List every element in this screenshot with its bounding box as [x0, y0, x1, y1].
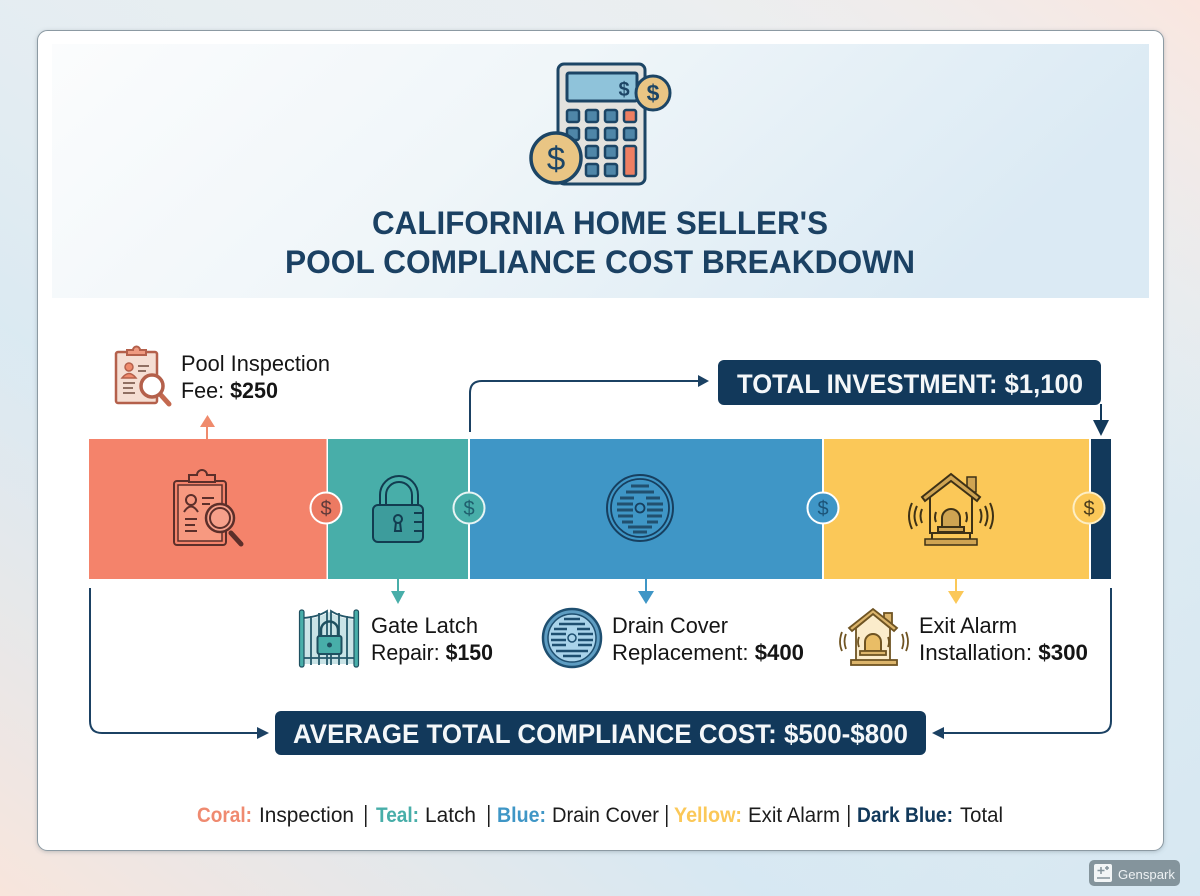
- watermark: Genspark: Genspark: [1118, 868, 1176, 882]
- callout: average total compliance cost: [275, 711, 926, 755]
- label: pool inspection fee: [181, 351, 330, 403]
- title: CALIFORNIA HOME SELLER'S: [372, 205, 828, 241]
- segment: blue drain cover: [470, 439, 822, 579]
- segment: dark blue total: [1091, 439, 1111, 579]
- segment: coral inspection: [89, 439, 326, 579]
- icon: drain cover small: [543, 609, 601, 667]
- arrow: left bracket to average cost: [90, 588, 269, 739]
- label: drain cover replacement: Drain Cover: [612, 613, 728, 638]
- legend: Coral:: [197, 804, 252, 827]
- badge: teal dollar: $: [463, 498, 475, 520]
- legend: Latch: [425, 804, 476, 827]
- title: [285, 205, 915, 280]
- label: drain cover replacement: [612, 613, 804, 665]
- panel: header band: [52, 44, 1149, 298]
- label: gate latch repair: Repair: $150: [371, 640, 493, 665]
- segment: yellow exit alarm: [824, 439, 1089, 579]
- label: gate latch repair: Gate Latch: [371, 613, 478, 638]
- legend: Drain Cover: [552, 804, 659, 827]
- legend: Exit Alarm: [748, 804, 840, 827]
- arrowhead: total investment: [698, 375, 709, 387]
- title: POOL COMPLIANCE COST BREAKDOWN: [285, 244, 915, 280]
- legend: Dark Blue:: [857, 804, 953, 827]
- arrow: bar to total investment: [470, 381, 700, 432]
- badge: teal dollar: [454, 492, 484, 524]
- segment: teal latch: [328, 439, 468, 579]
- arrow: total investment to dark segment: [1093, 404, 1109, 436]
- arrow: right bracket to average cost: [932, 588, 1111, 739]
- badge: blue dollar: [808, 492, 838, 524]
- icon: clipboard on coral: [174, 470, 241, 545]
- icon: padlock: [373, 476, 423, 542]
- icon: calculator with coins: $: [618, 79, 630, 101]
- callout: total investment: TOTAL INVESTMENT: $1,100: [737, 369, 1083, 399]
- label: drain cover replacement: Replacement: $400: [612, 640, 804, 665]
- label: pool inspection fee: Pool Inspection: [181, 351, 330, 376]
- label: exit alarm installation: [919, 613, 1088, 665]
- arrow: blue down: [638, 579, 654, 604]
- callout: average total compliance cost: AVERAGE TOTAL COMPLIANCE COST: $500-$800: [293, 719, 908, 749]
- badge: blue dollar: $: [817, 498, 829, 520]
- label: exit alarm installation: Exit Alarm: [919, 613, 1017, 638]
- legend: Inspection: [259, 804, 354, 827]
- arrow: yellow down: [948, 579, 964, 604]
- icon: calculator with coins: [531, 64, 670, 184]
- icon: house with alarm: [909, 474, 993, 545]
- legend: Total: [960, 804, 1003, 827]
- legend: Teal:: [376, 804, 419, 827]
- badge: coral dollar: $: [320, 498, 332, 520]
- icon: house alarm small: [840, 609, 908, 665]
- badge: yellow dollar: [1074, 492, 1104, 524]
- badge: coral dollar: [310, 492, 342, 524]
- label: exit alarm installation: Installation: $300: [919, 640, 1088, 665]
- callout: total investment: [718, 360, 1101, 405]
- legend: Blue:: [497, 804, 546, 827]
- icon: inspection clipboard: [116, 347, 169, 404]
- stacked cost bar: [89, 439, 1111, 579]
- label: pool inspection fee: Fee: $250: [181, 378, 278, 403]
- label: gate latch repair: [371, 613, 493, 665]
- arrow: bar to inspection label: [200, 415, 215, 439]
- icon: gate with lock: [300, 610, 358, 667]
- legend: [197, 804, 1003, 827]
- legend: Yellow:: [674, 804, 742, 827]
- icon: calculator with coins: $: [547, 140, 565, 177]
- arrow: teal down: [391, 579, 405, 604]
- icon: calculator with coins: $: [647, 80, 660, 106]
- watermark: Genspark: [1089, 860, 1180, 886]
- badge: yellow dollar: $: [1083, 498, 1095, 520]
- icon: drain cover: [607, 475, 673, 541]
